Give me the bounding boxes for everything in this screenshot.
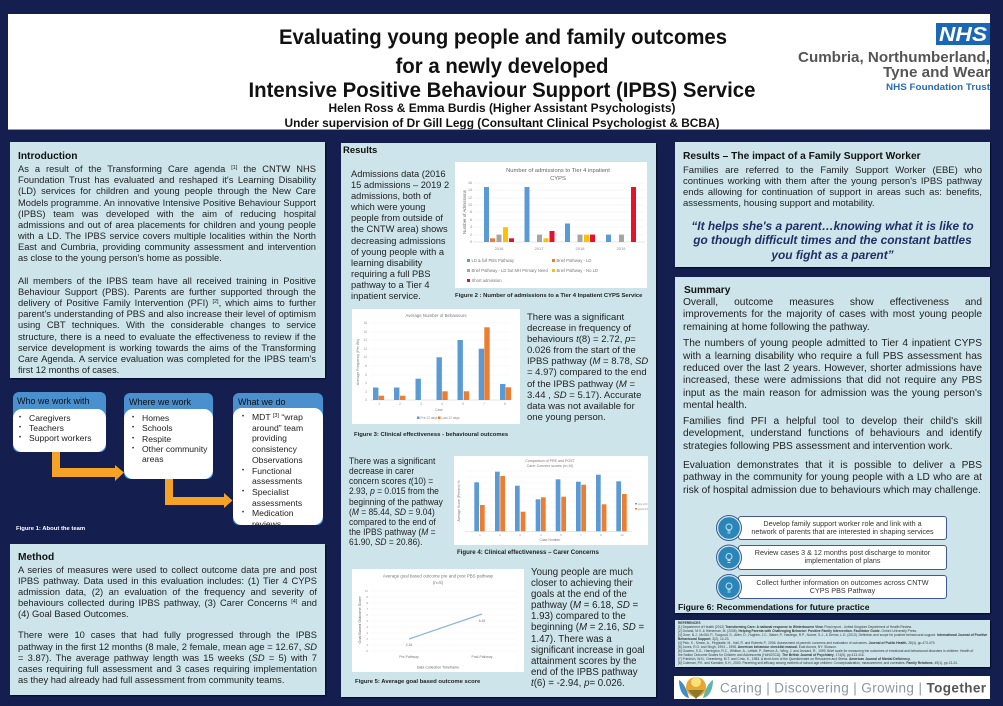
chart: comparison of carer concern scores: Case Number — [540, 538, 561, 542]
caption: figure 1: Figure 1: About the team — [16, 526, 85, 532]
header banner — [8, 14, 990, 130]
text: behaviour outcome: There was a significant — [527, 312, 624, 322]
text: goal outcome: pathway (M = 6.18, SD = — [531, 600, 638, 611]
caption: figure 2: Figure 2 : Number of admissions to a Tier 4 Inpatient CYPS Service — [455, 293, 642, 299]
text: introduction body: using CBT techniques. With the considerable changes to service — [18, 320, 316, 330]
chart: comparison of carer concern scores: pre-CC — [638, 502, 648, 506]
chart: average goal based outcome: 5 — [366, 619, 368, 623]
chart: average goal based outcome: 9 — [366, 595, 368, 599]
text: behaviour outcome: one young person. — [527, 412, 606, 423]
text: summary body: input as the main reason for admission was the young person's — [683, 388, 982, 399]
box: who we work with: Support workers — [29, 433, 92, 443]
caption: figure 3: Figure 3: Clinical effectiveness - behavioural outcomes — [354, 432, 508, 438]
chart: number of admissions: Brief Pathway - LD but MH Primary Need — [472, 268, 549, 273]
text: admissions: Admissions data (2016 — [351, 168, 446, 178]
text: admissions: pathway to a Tier 4 — [351, 280, 430, 290]
text: introduction body: Foundation Trust has evaluated and reshaped it's Learning Disability — [18, 175, 316, 185]
panel: references: [1] Department of Health (2012) Transforming Care: A national response to Winterbourne View. Final report., United Kingdom Department of Health Review. — [678, 625, 912, 629]
text: admissions: learning disability — [351, 258, 422, 268]
text: behaviour outcome: IPBS pathway (M = 8.78, SD — [527, 356, 648, 367]
recommendation 2: implementation of plans — [805, 556, 880, 565]
box: where we work: areas — [142, 454, 164, 464]
text: goal outcome: end of the IPBS pathway — [531, 667, 638, 678]
box: where we work: Other community — [142, 444, 207, 454]
text: carer concerns outcome — [349, 455, 443, 547]
caption: figure 6: Figure 6: Recommendations for future practice — [678, 602, 869, 612]
footer banner — [674, 676, 990, 699]
chart: number of admissions: CYPS — [550, 176, 566, 182]
text: admissions: decreasing admissions — [351, 236, 446, 246]
chart: average goal based outcome: 3 — [366, 631, 368, 635]
text: behaviour outcome: decrease in frequency of — [527, 323, 631, 334]
quote: you fight as a parent” — [771, 248, 894, 262]
text: carer concerns outcome: decrease in carer — [349, 465, 414, 476]
chart: average goal based outcome: 4 — [366, 625, 368, 629]
chart: number of admissions: 16 — [468, 181, 472, 185]
chart: comparison of carer concern scores: 7 — [580, 533, 582, 537]
arrow: who to where — [52, 452, 124, 481]
caption: figure 5: Figure 5: Average goal based outcome score — [355, 679, 480, 685]
chart: comparison of carer concern scores: 10 — [620, 533, 624, 537]
NHS trust logo: Cumbria, Northumberland, — [798, 49, 990, 66]
arrow: where to what — [165, 479, 232, 508]
text: method body: cases requiring full assessment and 3 cases requiring implementation — [18, 664, 317, 674]
text: introduction body: service development is working towards the aims of the Transforming — [18, 343, 316, 353]
chart: number of admissions: 6 — [470, 218, 472, 222]
panel: references: [2] Durand, M.V. & Hieneman, M. (2008). Helping Parents with Challenging Behavior: Positive Family Intervention. Facilitator Guide. Oxford University Press. — [678, 629, 917, 633]
text: carer concerns outcome: There was a significant — [349, 455, 435, 466]
text: method body: (4) Goal Based Outcomes. — [18, 609, 129, 619]
heading: method: Method — [18, 552, 54, 563]
text: goal outcome: beginning (M = 2.16, SD = — [531, 622, 644, 633]
box: what we do: Medication — [252, 508, 294, 518]
recommendation 1 — [738, 516, 947, 540]
chart: average number of behaviours: 8 — [504, 402, 506, 406]
text: summary body: mental health. — [683, 400, 747, 411]
chart: comparison of carer concern scores: Comparison of PRE and POST — [525, 459, 576, 463]
text: goal outcome: goals at the end of the — [531, 589, 627, 600]
chart: average number of behaviours: 3 — [420, 402, 422, 406]
text: summary body: Evaluation demonstrates that it is possible to deliver a PBS — [683, 460, 982, 471]
text: summary body: Families find PFI a helpful tool to develop their child's skill — [683, 416, 982, 427]
chart: average number of behaviours: Average Frequency (Per Wk) — [356, 339, 360, 385]
text: introduction body: (IPBS) team was developed with the aim of reducing hospital — [18, 209, 316, 219]
text: summary body: reduced over the last 2 years. However, shorter admissions have — [683, 363, 982, 374]
text: goal outcome: attainment scores by the — [531, 656, 637, 667]
chart: average goal based outcome: 1 — [366, 643, 368, 647]
heading: impact: Results – The impact of a Family Support Worker — [683, 151, 921, 162]
chart: comparison of carer concern scores — [454, 456, 648, 545]
box: where we work: Schools — [142, 423, 173, 433]
recommendation 1: Develop family support worker role and link with a — [763, 519, 922, 528]
chart: average number of behaviours: Last 12 days — [442, 416, 460, 420]
text: admissions: the CNTW area) shows — [351, 224, 448, 234]
text: introduction body: structure, there is a need to evaluate the effectiveness to review if the — [18, 332, 316, 342]
panel: references: [7] Friedrich, W.N., Greenberg, M.T. and Crnic, K., 1983. A short-form of the Questionnaire on Resources and Stress. American Journal of Mental Deficiency. — [678, 657, 910, 661]
chart: number of admissions: Brief Pathway - LD — [556, 258, 591, 263]
chart: number of admissions: 2 — [470, 233, 472, 237]
text: goal outcome — [531, 566, 645, 689]
NHS trust logo: Tyne and Wear — [883, 64, 990, 81]
quote: go though difficult times and the constant battles — [693, 233, 972, 247]
chart: average goal based outcome: 2 — [366, 637, 368, 641]
text: admissions: inpatient service. — [351, 291, 421, 301]
chart: average number of behaviours: 2 — [365, 390, 367, 394]
chart: average goal based outcome: Average goal based outcome pre and post PBS pathway — [383, 574, 494, 578]
chart: average goal based outcome: Goal Based Outcome Score — [358, 596, 362, 644]
text: carer concerns outcome: (M = 85.44, SD = 9.04) — [349, 506, 435, 517]
text: introduction body: Models programme. An innovative Intensive Positive Behaviour Support — [18, 198, 316, 208]
box: who we work with: Who we work with — [17, 396, 90, 406]
title: Intensive Positive Behaviour Support (IPBS) Service — [248, 79, 756, 102]
chart: number of admissions: 10 — [468, 203, 472, 207]
text: impact body: ends allowing for continuation of support in areas such as: benefits, — [683, 187, 982, 198]
text: summary body — [683, 297, 982, 496]
chart: average number of behaviours: Case — [435, 408, 443, 412]
recommendation 1: network of parents that are interested in shaping services — [751, 527, 934, 536]
chart: average number of behaviours: 14 — [363, 338, 367, 342]
text: behaviour outcome: = 4.97) compared to the end — [527, 367, 647, 378]
text: introduction body: first 12 months of cases. — [18, 365, 119, 375]
text: introduction body: as close to the young person's home as possible. — [18, 253, 222, 263]
text: admissions: 15 admissions – 2019 2 — [351, 180, 449, 190]
text: goal outcome: t(6) = -2.94, p= 0.026. — [531, 678, 625, 689]
text: method body — [18, 564, 317, 685]
text: method body: A series of measures were used to collect outcome data pre and post — [18, 564, 317, 574]
text: admissions: which were young — [351, 202, 425, 212]
chart: comparison of carer concern scores: 3 — [519, 533, 521, 537]
text: summary body: risk of hospital admission due to behaviours which may challenge. — [683, 485, 981, 496]
box: where we work: Where we work — [129, 397, 191, 407]
chart: average number of behaviours: 18 — [363, 321, 367, 325]
chart: average number of behaviours: Pre 12 days — [420, 416, 438, 420]
text: introduction body: (LD) services for children and young people through the New Care — [18, 186, 316, 196]
panel: references: [6] Gowers, S.G., Harrington, R.C., Whitton, A., Lelliott, P., Beevor, A., Wing, J. and Jezzard, R., 1999. Brief scale for measuring the outcomes of emotional and behavioural disorders in children: Health of — [678, 649, 973, 653]
box: what we do: assessments — [252, 498, 302, 508]
text: summary body: development, understand functions of behaviours and identify — [683, 428, 982, 439]
chart: comparison of carer concern scores: Carer Concern scores (n=10) — [527, 464, 573, 468]
text: behaviour outcome: 3.44 , SD = 5.17). Accurate — [527, 390, 641, 401]
NHS trust logo: NHS Foundation Trust — [886, 82, 990, 92]
chart: number of admissions: 2016 — [495, 246, 504, 251]
box: what we do: What we do — [238, 397, 286, 407]
chart: number of admissions: 0 — [470, 240, 472, 244]
panel: references: REFERENCES — [678, 621, 701, 625]
chart: average goal based outcome: Data Collection Timeframe — [417, 666, 459, 670]
text: introduction body: delivery of Positive Family Intervention (PFI) [2], which aims to further — [18, 298, 316, 308]
chart: average number of behaviours: 1 — [378, 402, 380, 406]
text: method body: = 3.87). The average pathway length was 15 weeks (SD = 5) with 7 — [18, 653, 317, 663]
text: introduction body: admissions and out of area placements for children and young people — [18, 220, 316, 230]
text: admissions: requiring a full PBS — [351, 269, 431, 279]
chart: number of admissions: Number of Admissions — [462, 189, 467, 234]
text: admissions: admissions, both of — [351, 191, 431, 201]
box: where we work — [124, 393, 213, 479]
text: goal outcome: 1.93) compared to the — [531, 611, 626, 622]
recommendation 3: Collect further information on outcomes across CNTW — [756, 578, 929, 587]
text: method body: behaviours collected during IPBS pathway, (3) Carer Concerns [4] and — [18, 598, 317, 608]
text: method body: There were 10 cases that had fully progressed through the IPBS — [18, 630, 317, 640]
chart: comparison of carer concern scores: Average Score (Percent) % — [457, 480, 461, 522]
chart: average number of behaviours: 5 — [462, 402, 464, 406]
text: goal outcome: Young people are much — [531, 566, 633, 578]
box: what we do: Specialist — [252, 487, 289, 497]
text: summary body: Overall, outcome measures show effectiveness and — [683, 297, 982, 308]
chart: comparison of carer concern scores: 1 — [479, 533, 481, 537]
box: who we work with — [13, 392, 106, 452]
panel: references: Behavioural Support, 3(2), 14-23. — [678, 637, 729, 641]
heading: introduction: Introduction — [18, 151, 77, 162]
text: behaviour outcome: behaviours t(8) = 2.72, p= — [527, 334, 636, 345]
panel: results — [341, 143, 656, 697]
chart: average goal based outcome: 10 — [365, 589, 368, 593]
chart: average goal based outcome: (n=5) — [433, 580, 444, 585]
text: method body: admission data, (2) an evaluation of the frequency and severity of — [18, 587, 317, 597]
text: summary body: with a learning disability who require a full PBS assessment has — [683, 351, 982, 362]
chart: number of admissions: 12 — [468, 196, 472, 200]
box: what we do: around” team — [252, 423, 303, 433]
panel: references — [675, 620, 990, 667]
recommendation 2: Review cases 3 & 12 months post discharge to monitor — [755, 548, 930, 557]
box: where we work: Respite — [142, 434, 171, 444]
chart: number of admissions: 2018 — [576, 246, 585, 251]
heading: results: Results — [343, 144, 377, 156]
panel: references: [3] Gore, N.J., McGill, P., Toogood, S., Allen, D., Hughes, J.C., Baker, P., Hastings, R.P., Noone, S.J., & Denne, L.D. (2013). Definition and scope for positive behavioural support. International Journal of Positive — [678, 633, 987, 637]
box: what we do: Observations — [252, 455, 303, 465]
panel: references: the Nation Outcome Scales for Children and Adolescents (HoNOSCA). The British Journal of Psychiatry, 174(5), pp.413-416. — [678, 653, 865, 657]
icon: values logo — [679, 677, 713, 699]
chart: comparison of carer concern scores: 5 — [560, 533, 562, 537]
panel: introduction — [10, 142, 325, 378]
text: introduction body: Behaviour Support (PBS). Parents are further supported through the — [18, 287, 316, 297]
chart: average goal based outcome: 2.16 — [406, 643, 412, 647]
text: introduction body — [18, 164, 316, 375]
text: behaviour outcome — [527, 312, 648, 423]
text: summary body: increased, these were admissions that did not require any PBS — [683, 375, 982, 386]
box: what we do: consistency — [252, 444, 297, 454]
text: goal outcome: closer to achieving their — [531, 578, 633, 589]
title — [248, 26, 756, 129]
title: Helen Ross & Emma Burdis (Higher Assistant Psychologists) — [328, 101, 676, 115]
chart: number of admissions: Number of admissions to Tier 4 inpatient — [506, 168, 610, 174]
text: admissions: of young people with a — [351, 247, 444, 257]
recommendation 3 — [738, 575, 947, 599]
text: behaviour outcome: data was not available for — [527, 401, 635, 412]
chart: average goal based outcome: 6 — [366, 613, 368, 617]
text: method body: pathway in the first 12 months (8 male, 2 female, mean age = 12.67, SD — [18, 642, 317, 652]
chart: number of admissions: 4 — [470, 225, 472, 229]
text: carer concerns outcome: compared to the end of — [349, 516, 436, 527]
text: method body: IPBS pathway. Data used in this evaluation includes: (1) Tier 4 CYPS — [18, 576, 317, 586]
text: carer concerns outcome: beginning of the pathway — [349, 496, 443, 507]
chart: average number of behaviours — [352, 309, 520, 424]
chart: comparison of carer concern scores: 2 — [499, 533, 501, 537]
box: where we work: Homes — [142, 413, 169, 423]
text: introduction body: All members of the IPBS team have all received training in Positive — [18, 276, 316, 286]
chart: average number of behaviours: 4 — [441, 402, 443, 406]
text: introduction body: As a result of the Transforming Care agenda [1] the CNTW NHS — [18, 164, 316, 174]
chart: number of admissions: 8 — [470, 210, 472, 214]
chart: average goal based outcome: 6.18 — [479, 619, 485, 623]
chart: average number of behaviours: 7 — [483, 402, 485, 406]
box: what we do: assessments — [252, 476, 302, 486]
text: carer concerns outcome: 2.93, p = 0.015 from the — [349, 485, 439, 496]
quote: “It helps she's a parent…knowing what it is like to — [691, 218, 974, 232]
text: impact body: continues working with them after the young person's IPBS pathway — [683, 176, 982, 187]
caption: figure 4: Figure 4: Clinical effectiveness – Carer Concerns — [457, 549, 599, 556]
panel: references: [8] Coleman, P.K. and Karraker, K.H., 2000. Parenting self-efficacy among mothers of school-age children: Conceptualization, measurement, and correlates. Family Relations, 49(1), pp.13-24. — [678, 661, 958, 665]
text: introduction body: with a LD. The IPBS service covers multiple localities within the North — [18, 231, 316, 241]
panel: impact of family support worker — [675, 142, 990, 267]
text: admissions — [351, 168, 449, 301]
box: what we do — [233, 393, 323, 525]
chart: number of admissions: 2019 — [617, 246, 626, 251]
chart: average number of behaviours: Average Number of Behaviours — [405, 313, 467, 318]
panel: summary — [675, 277, 990, 613]
chart: average goal based outcome: Post-Pathway — [472, 655, 493, 659]
recommendation 3: CYPS PBS Pathway — [810, 586, 875, 595]
chart: number of admissions: Brief Pathway - No LD — [556, 268, 598, 273]
text: admissions: people from outside of — [351, 213, 443, 223]
box: who we work with: Caregivers — [29, 413, 71, 423]
chart: number of admissions: Short admission — [472, 278, 502, 283]
icons: lightbulbs — [716, 515, 742, 600]
chart: average goal based outcome: Pre-Pathway — [399, 655, 419, 659]
chart: average goal based outcome — [352, 569, 524, 672]
chart: number of admissions: 2017 — [535, 246, 544, 251]
text: introduction body: parent's understanding of PBS and also increase their level of optimism — [18, 309, 316, 319]
chart: average number of behaviours: 10 — [363, 355, 367, 359]
recommendation 2 — [738, 545, 947, 570]
chart: average number of behaviours: 0 — [365, 398, 367, 402]
heading: summary: Summary — [684, 285, 730, 296]
text: carer concerns outcome: concern scores t(10) = — [349, 475, 433, 486]
text: summary body: strategies following PBS assessment and intervention work. — [683, 441, 953, 452]
chart: number of admissions: 14 — [468, 188, 472, 192]
panel: references: [5] Jones, R.G. and Singh, 1994 – 1998. American behaviour checklist manual. East Aurora, NY: Slosson. — [678, 645, 837, 649]
title: for a newly developed — [396, 55, 608, 78]
panel: references: [4] Pelc, K., Simon, A., Peppiatte, M., Hall, R. and Roberts P., 2006. Assessment of parents' concerns and evaluation of outcomes. Journal of Public Health, 28(4), pp.473-479. — [678, 641, 935, 645]
text: summary body: The numbers of young people admitted to Tier 4 inpatient CYPS — [683, 338, 982, 349]
text: carer concerns outcome: the IPBS pathway (M = — [349, 526, 436, 537]
chart: average number of behaviours: 16 — [363, 330, 367, 334]
text: summary body: remaining at home following the pathway. — [683, 322, 870, 333]
text: carer concerns outcome: 61.90, SD = 20.86). — [349, 536, 422, 547]
text: goal outcome: significant increase in goal — [531, 645, 645, 656]
text: introduction body: East and Cumbria, providing community assessment and intervention — [18, 242, 316, 252]
slogan: Caring | Discovering | Growing | Together — [720, 680, 987, 696]
chart: comparison of carer concern scores: 4 — [540, 533, 542, 537]
chart: average goal based outcome: 8 — [366, 601, 368, 605]
text: behaviour outcome: of the IPBS pathway (M = — [527, 379, 635, 390]
text: impact body: Families are referred to the Family Support Worker (EBE) who — [683, 164, 982, 176]
text: goal outcome: 1.47). There was a — [531, 634, 612, 645]
text: impact body — [683, 164, 982, 209]
panel: method — [10, 544, 325, 695]
box: what we do: MDT [3] “wrap — [252, 412, 303, 422]
chart: average number of behaviours: 4 — [365, 381, 367, 385]
chart: average goal based outcome: 0 — [366, 649, 368, 653]
box: what we do: providing — [252, 433, 287, 443]
text: introduction body: Care Agenda. A service evaluation was completed for the IPBS team's — [18, 354, 316, 364]
box: who we work with: Teachers — [29, 423, 64, 433]
chart: average number of behaviours: 12 — [363, 347, 367, 351]
chart: comparison of carer concern scores: 8 — [600, 533, 602, 537]
text: summary body: improvements for the majority of cases with most young people — [683, 309, 982, 320]
chart: average number of behaviours: 8 — [365, 364, 367, 368]
NHS trust logo — [798, 23, 990, 92]
chart: number of admissions: LD & full PBS Pathway — [472, 258, 515, 263]
chart: number of admissions — [455, 162, 647, 288]
chart: average number of behaviours: 2 — [399, 402, 401, 406]
text: behaviour outcome: 0.026 from the start of the — [527, 345, 636, 356]
box: what we do: Functional — [252, 466, 292, 476]
text: method body: as they had already had full assessment from community teams. — [18, 675, 284, 685]
quote — [691, 218, 974, 262]
title: Evaluating young people and family outcomes — [279, 26, 727, 49]
chart: average number of behaviours: 6 — [365, 373, 367, 377]
chart: average goal based outcome: 7 — [366, 607, 368, 611]
NHS trust logo: NHS — [939, 24, 988, 46]
text: summary body: pathway in the community for young people with a LD who are at — [683, 472, 982, 483]
text: impact body: assessments, housing support and motability. — [683, 198, 875, 209]
